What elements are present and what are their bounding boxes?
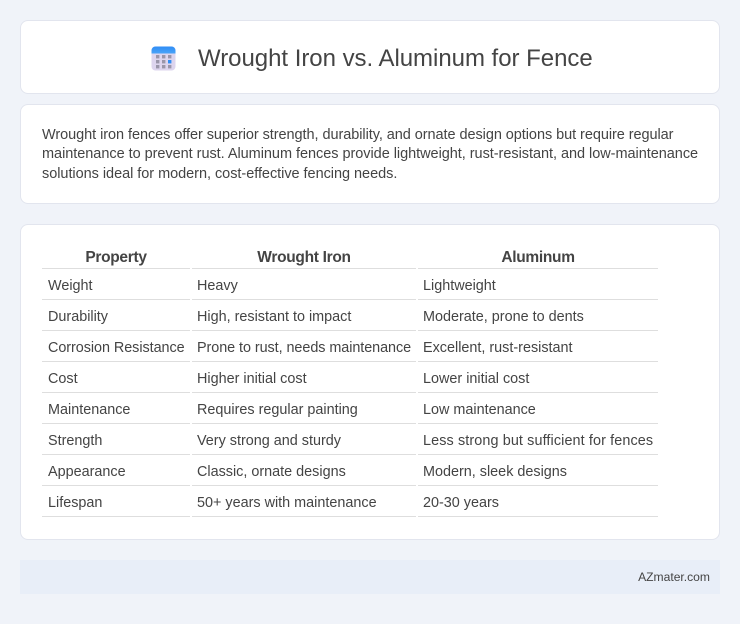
row: durability <box>42 309 658 331</box>
row: maintenance: Requires regular painting <box>197 402 358 418</box>
row: cost: Cost <box>48 371 78 387</box>
table header: Property <box>85 249 147 266</box>
row: strength <box>42 433 658 455</box>
row: cost: Lower initial cost <box>423 371 529 387</box>
row: durability: High, resistant to impact <box>197 309 351 325</box>
table header <box>42 249 658 269</box>
row: weight: Heavy <box>197 278 238 294</box>
table header: Aluminum <box>501 249 575 266</box>
row: weight: Lightweight <box>423 278 496 294</box>
title: Wrought Iron vs. Aluminum for Fence <box>198 45 593 72</box>
row: durability: Durability <box>48 309 108 325</box>
row: strength: Less strong but sufficient for fences <box>423 433 653 449</box>
panel: summary <box>20 104 720 204</box>
row: appearance: Classic, ornate designs <box>197 464 346 480</box>
table header: Wrought Iron <box>257 249 351 266</box>
summary text: Wrought iron fences offer superior strength, durability, and ornate design options but require regular <box>42 126 673 142</box>
summary text: solutions ideal for modern, cost-effective fencing needs. <box>42 166 397 182</box>
row: strength: Very strong and sturdy <box>197 433 341 449</box>
panel: title card <box>20 20 720 94</box>
row: lifespan <box>42 495 658 517</box>
panel: comparison table <box>20 224 720 540</box>
row: maintenance: Maintenance <box>48 402 130 418</box>
row: corrosion resistance: Prone to rust, needs maintenance <box>197 340 411 356</box>
row: maintenance <box>42 402 658 424</box>
row: appearance: Appearance <box>48 464 126 480</box>
summary text: maintenance to prevent rust. Aluminum fences provide lightweight, rust-resistant, and low-maintenance <box>42 146 698 162</box>
row: lifespan: 20-30 years <box>423 495 499 511</box>
row: lifespan: 50+ years with maintenance <box>197 495 377 511</box>
row: corrosion resistance: Excellent, rust-resistant <box>423 340 573 356</box>
row: corrosion resistance: Corrosion Resistance <box>48 340 185 356</box>
footer bar <box>20 560 720 594</box>
row: appearance <box>42 464 658 486</box>
footer credit: AZmater.com <box>638 570 710 584</box>
row: corrosion resistance <box>42 340 658 362</box>
row: cost <box>42 371 658 393</box>
row: lifespan: Lifespan <box>48 495 102 511</box>
row: durability: Moderate, prone to dents <box>423 309 584 325</box>
row: maintenance: Low maintenance <box>423 402 536 418</box>
row: appearance: Modern, sleek designs <box>423 464 567 480</box>
row: weight: Weight <box>48 278 93 294</box>
row: strength: Strength <box>48 433 102 449</box>
row: cost: Higher initial cost <box>197 371 307 387</box>
row: weight <box>42 278 658 300</box>
summary text <box>42 126 698 182</box>
icon: calendar <box>152 46 176 70</box>
